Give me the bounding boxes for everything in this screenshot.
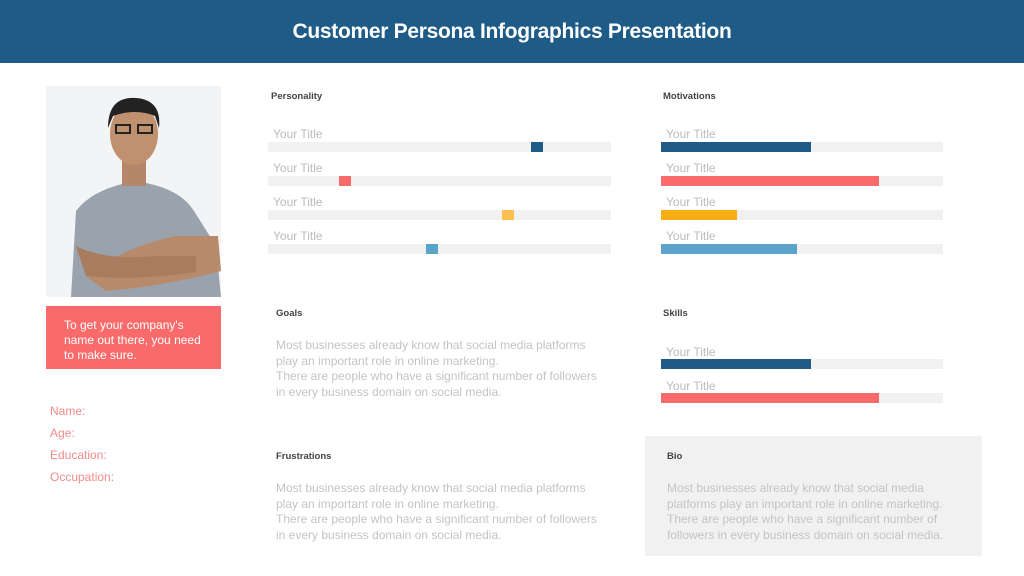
panel: frustrations: play an important role in online marketing. (276, 496, 499, 510)
panel: skills: Your Title (666, 345, 716, 359)
panel: bio: There are people who have a significant number of (667, 512, 937, 526)
panel: skills (661, 308, 943, 403)
panel: bio: followers in every business domain on social media. (667, 528, 943, 542)
panel: bio (645, 436, 982, 556)
panel: skills: Your Title (666, 379, 716, 393)
panel: bio: Bio (667, 451, 682, 462)
profile labels: Age: (50, 426, 75, 440)
panel: frustrations (276, 451, 597, 542)
panel: goals: There are people who have a significant number of followers (276, 369, 597, 383)
panel: frustrations: Frustrations (276, 451, 331, 462)
profile labels: Education: (50, 448, 107, 462)
quote box: To get your company's name out there, you need to make sure. (64, 318, 201, 362)
panel: personality: Your Title (273, 161, 323, 175)
quote box (46, 306, 221, 369)
panel: goals: play an important role in online marketing. (276, 354, 499, 368)
panel: goals: in every business domain on social media. (276, 384, 501, 398)
profile labels (50, 404, 114, 484)
header bar (0, 0, 1024, 63)
panel: bio: platforms play an important role in online marketing. (667, 496, 942, 510)
panel: motivations: Your Title (666, 195, 716, 209)
panel: motivations: Your Title (666, 127, 716, 141)
panel: motivations (661, 91, 943, 254)
panel: frustrations: There are people who have a significant number of followers (276, 512, 597, 526)
panel: skills: Skills (663, 308, 688, 319)
panel: motivations: Your Title (666, 229, 716, 243)
panel: frustrations: in every business domain on social media. (276, 528, 501, 542)
panel: goals: Goals (276, 308, 302, 319)
panel: personality (268, 91, 611, 254)
photo (46, 86, 221, 297)
panel: frustrations: Most businesses already know that social media platforms (276, 481, 585, 495)
panel: goals: Most businesses already know that social media platforms (276, 338, 585, 352)
panel: personality: Your Title (273, 195, 323, 209)
panel: goals (276, 308, 597, 398)
panel: personality: Your Title (273, 127, 323, 141)
panel: personality: Personality (271, 91, 322, 102)
profile labels: Occupation: (50, 470, 114, 484)
header bar: Customer Persona Infographics Presentation (292, 20, 732, 43)
panel: motivations: Your Title (666, 161, 716, 175)
profile labels: Name: (50, 404, 85, 418)
panel: personality: Your Title (273, 229, 323, 243)
panel: motivations: Motivations (663, 91, 716, 102)
panel: bio: Most businesses already know that social media (667, 481, 924, 495)
